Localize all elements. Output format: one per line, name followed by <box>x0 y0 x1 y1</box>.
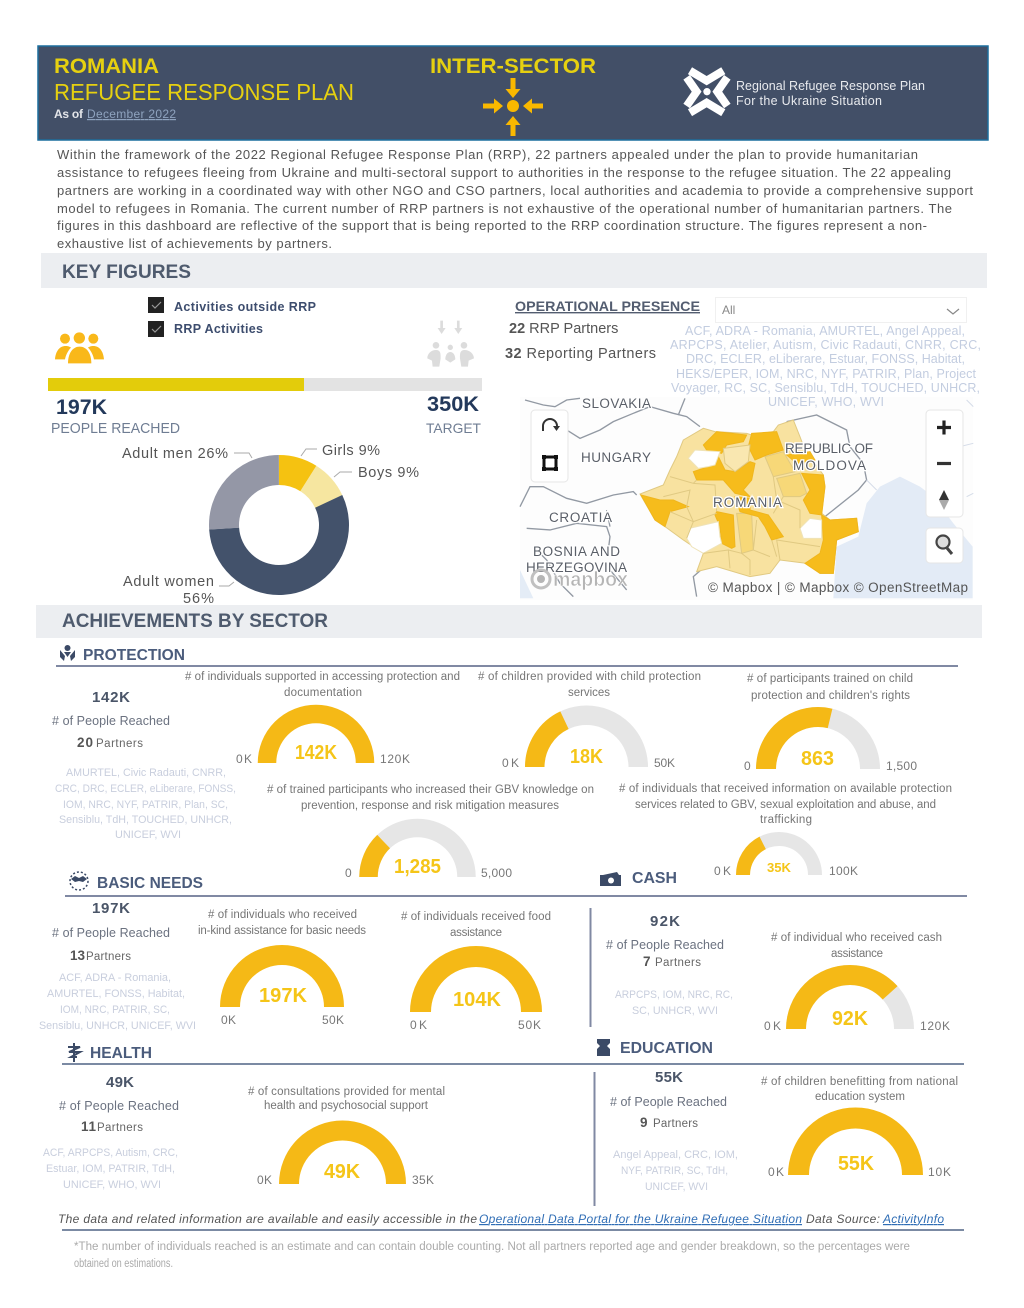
gauge: GBV information: trafficking <box>760 814 812 826</box>
heading: operational presence: OPERATIONAL PRESENCE <box>515 298 700 314</box>
gauge: mental health consultations: 49K <box>324 1161 361 1183</box>
icon: inward arrows <box>483 78 543 136</box>
map labels: HUNGARY <box>581 450 651 465</box>
summary stats <box>52 900 170 963</box>
gauge: child rights training <box>744 673 917 773</box>
logo text: Regional Refugee Response Plan <box>736 79 925 93</box>
summary stats: 142K <box>92 689 130 706</box>
gauge: protection and documentation: 120K <box>380 752 410 766</box>
map labels: BOSNIA AND <box>533 544 620 559</box>
partners: Estuar, IOM, PATRIR, TdH, <box>46 1163 175 1175</box>
partners: ARPCPS, IOM, NRC, RC, <box>615 989 733 1001</box>
gauge: mental health consultations: 35K <box>412 1173 434 1187</box>
donut chart: age and gender breakdown: Adult women <box>123 574 214 590</box>
gauge: food assistance: # of individuals received food <box>401 911 551 923</box>
heading: PROTECTION <box>83 647 185 664</box>
gauge: child protection services <box>478 671 701 770</box>
logo text <box>736 79 925 108</box>
figure: people reached: PEOPLE REACHED <box>51 421 180 437</box>
gauge: GBV information: 35K <box>767 860 792 875</box>
gauge: GBV information: 100K <box>829 864 858 878</box>
summary stats: 13 <box>70 948 85 963</box>
gauge: food assistance <box>401 911 551 1032</box>
legend: activity checkboxes: Activities outside RRP <box>174 300 316 314</box>
panel: header banner <box>38 46 988 140</box>
icon: health <box>68 1043 80 1062</box>
gauge: in-kind assistance <box>198 909 366 1027</box>
gauge: in-kind assistance: # of individuals who received <box>208 909 357 921</box>
date line: December 2022 <box>87 107 176 121</box>
gauge: child rights training: protection and children's rights <box>751 690 910 702</box>
text block: introduction: Within the framework of the 2022 Regional Refugee Response Plan (RRP), 22 partners appealed under the plan to provide humanitarian <box>57 147 918 162</box>
summary stats: 49K <box>106 1074 134 1091</box>
mapbox logo: mapbox <box>553 569 628 591</box>
text block: introduction: assistance to refugees fleeing from Ukraine and multi-sectoral support to authorities in the response to the refugee situation. The 22 appealing <box>57 165 951 180</box>
gauge: GBV knowledge: prevention, response and risk mitigation measures <box>301 800 559 812</box>
gauge: GBV knowledge: 1,285 <box>394 856 441 878</box>
partners <box>43 1147 178 1191</box>
partners: UNICEF, WVI <box>645 1181 708 1193</box>
gauge: food assistance: 104K <box>453 989 502 1011</box>
icon: protection hands <box>60 645 75 661</box>
gauge: GBV knowledge: 5,000 <box>481 866 512 880</box>
heading: CASH <box>632 870 677 887</box>
partners <box>55 767 236 841</box>
summary stats <box>610 1069 727 1130</box>
summary stats <box>59 1074 179 1134</box>
heading: EDUCATION <box>620 1040 713 1057</box>
figure: target <box>426 393 481 436</box>
partner list: ACF, ADRA - Romania, AMURTEL, Angel Appeal, <box>685 324 965 338</box>
partner list <box>670 324 981 409</box>
gauge: in-kind assistance: 50K <box>322 1013 344 1027</box>
partner list: Voyager, RC, SC, Sensiblu, TdH, TOUCHED, UNHCR, <box>671 381 980 395</box>
partners: SC, UNHCR, WVI <box>632 1005 718 1017</box>
gauge: GBV knowledge: 0 <box>345 866 352 880</box>
map labels: CROATIA <box>549 510 612 525</box>
gauge: in-kind assistance: 0K <box>221 1013 236 1027</box>
summary stats: Partners <box>653 1118 698 1130</box>
partner counts: 32 Reporting Partners <box>505 346 656 362</box>
map labels: MOLDOVA <box>793 458 866 473</box>
gauge: protection and documentation: # of individuals supported in accessing protection and <box>185 671 460 683</box>
summary stats <box>52 689 170 750</box>
summary stats: # of People Reached <box>52 714 170 728</box>
partners: UNICEF, WHO, WVI <box>63 1179 161 1191</box>
partners: Sensiblu, TdH, TOUCHED, UNHCR, <box>59 814 232 826</box>
summary stats: 197K <box>92 900 130 917</box>
Romania counties <box>640 420 858 577</box>
footnote <box>74 1241 910 1270</box>
text block: introduction: exhaustive list of achievements by partners. <box>57 236 332 251</box>
logo text: For the Ukraine Situation <box>736 94 882 108</box>
gauge: mental health consultations: health and psychosocial support <box>264 1100 429 1112</box>
gauge: child rights training: 863 <box>801 748 834 770</box>
gauge: child protection services: # of children provided with child protection <box>478 671 701 683</box>
gauge: cash assistance: assistance <box>831 948 883 960</box>
panel: health <box>43 1043 964 1191</box>
heading: HEALTH <box>90 1045 152 1062</box>
gauge: national education system: education system <box>815 1091 905 1103</box>
text block: introduction: partners are working in a coordinated way with other NGO and CSO partners, local authorities and academia to provide a comprehensive support <box>57 183 973 198</box>
partners: IOM, NRC, NYF, PATRIR, Plan, SC, <box>63 799 228 811</box>
map labels: REPUBLIC OF <box>785 441 873 456</box>
icon: basic needs <box>70 872 88 890</box>
partners: AMURTEL, Civic Radauti, CNRR, <box>66 767 226 779</box>
gauge: GBV information <box>619 783 952 878</box>
summary stats: Partners <box>96 738 143 750</box>
footnote: obtained on estimations. <box>74 1258 173 1270</box>
summary stats: 9 <box>640 1115 648 1130</box>
borders <box>520 398 867 597</box>
donut chart: age and gender breakdown: Girls 9% <box>322 443 380 459</box>
gauge: in-kind assistance: 197K <box>259 985 308 1007</box>
gauge: protection and documentation: documentation <box>284 687 362 699</box>
map labels <box>526 396 873 575</box>
gauge: national education system: 10K <box>928 1165 951 1179</box>
gauge: child protection services: services <box>568 687 610 699</box>
partner list: UNICEF, WHO, WVI <box>768 395 884 409</box>
icon: education <box>597 1039 610 1056</box>
progress bar: people reached vs target <box>48 378 482 391</box>
gauge: GBV information: services related to GBV, sexual exploitation and abuse, and <box>635 799 936 811</box>
gauge: national education system <box>761 1076 958 1179</box>
summary stats: # of People Reached <box>52 926 170 940</box>
icon: people reached <box>55 332 104 363</box>
gauge: child protection services: 50K <box>654 756 675 770</box>
gauge: GBV information: 0K <box>714 864 731 878</box>
gauge: child protection services: 18K <box>570 746 603 768</box>
heading: achievements by sector <box>36 605 982 638</box>
gauge: child protection services: 0K <box>502 756 519 770</box>
partners: NYF, PATRIR, SC, TdH, <box>621 1165 728 1177</box>
panel: protection <box>52 645 958 880</box>
partners: Angel Appeal, CRC, IOM, <box>613 1149 738 1161</box>
gauge: mental health consultations: # of consultations provided for mental <box>248 1086 445 1098</box>
partner list: ARPCPS, Atelier, Autism, Civic Radauti, CNRR, CRC, <box>670 338 981 352</box>
heading: BASIC NEEDS <box>97 875 203 892</box>
gauge: cash assistance <box>764 932 950 1033</box>
gauge: mental health consultations <box>248 1086 445 1187</box>
text block: introduction: model to refugees in Romania. The current number of RRP partners is not exhaustive of the operational number of humanitarian partners. The <box>57 201 952 216</box>
summary stats: 11 <box>81 1119 96 1134</box>
gauge: national education system: # of children benefitting from national <box>761 1076 958 1088</box>
summary stats: 7 <box>643 954 651 969</box>
title: Romania: ROMANIA <box>54 55 159 78</box>
footer: data source: ActivityInfo <box>882 1212 944 1226</box>
donut chart: age and gender breakdown: Adult men 26% <box>122 446 228 462</box>
map attribution: © Mapbox | © Mapbox © OpenStreetMap <box>708 580 968 595</box>
gauge: food assistance: assistance <box>450 927 502 939</box>
donut chart: age and gender breakdown: 56% <box>183 591 214 607</box>
donut chart: age and gender breakdown <box>122 443 419 607</box>
icon: cash <box>600 872 621 886</box>
text block: introduction <box>57 147 973 251</box>
map labels: HERZEGOVINA <box>526 560 627 575</box>
dropdown filter <box>716 298 966 322</box>
gauge: GBV information: # of individuals that received information on available protection <box>619 783 952 795</box>
partners: ACF, ARPCPS, Autism, CRC, <box>43 1147 178 1159</box>
gauge: national education system: 55K <box>838 1153 875 1175</box>
gauge: national education system: 0K <box>768 1165 784 1179</box>
footer: data source: The data and related information are available and easily accessible in the <box>58 1212 477 1226</box>
gauge: food assistance: 0K <box>410 1018 427 1032</box>
map: operational presence in Romania <box>520 396 973 600</box>
gauge: protection and documentation: 142K <box>295 742 337 764</box>
gauge: child rights training: 0 <box>744 759 751 773</box>
gauge: GBV knowledge: # of trained participants who increased their GBV knowledge on <box>267 784 594 796</box>
figure: people reached: 197K <box>56 396 107 419</box>
gauge: protection and documentation <box>185 671 460 766</box>
map labels: ROMANIA <box>713 495 782 510</box>
donut chart: age and gender breakdown: Boys 9% <box>358 465 419 481</box>
heading: Inter-sector: INTER-SECTOR <box>430 55 596 78</box>
legend: activity checkboxes: RRP Activities <box>174 322 263 336</box>
legend: activity checkboxes <box>148 297 316 337</box>
partner counts <box>505 321 656 362</box>
panel: education <box>594 1039 958 1206</box>
map controls left <box>531 410 568 482</box>
gauge: protection and documentation: 0K <box>236 752 252 766</box>
partner counts: 22 RRP Partners <box>509 321 618 337</box>
partner list: HEKS/EPER, IOM, NRC, NYF, PATRIR, Plan, Project <box>676 367 977 381</box>
dropdown filter: All <box>722 303 735 317</box>
map controls right <box>926 410 963 563</box>
partners <box>613 1149 738 1193</box>
summary stats: # of People Reached <box>606 938 724 952</box>
summary stats <box>606 913 724 969</box>
partners: AMURTEL, FONSS, Habitat, <box>47 988 185 1000</box>
summary stats: 92K <box>650 913 680 930</box>
heading: key figures: KEY FIGURES <box>62 261 191 283</box>
gauge: cash assistance: 92K <box>832 1008 869 1030</box>
partner list: DRC, ECLER, eLiberare, Estuar, FONSS, Habitat, <box>686 352 965 366</box>
gauge: food assistance: 50K <box>518 1018 541 1032</box>
panel: cash <box>590 870 950 1033</box>
panel: basic needs <box>39 872 967 1032</box>
gauge: in-kind assistance: in-kind assistance for basic needs <box>198 925 366 937</box>
summary stats: 20 <box>77 735 93 750</box>
summary stats: # of People Reached <box>59 1099 179 1113</box>
partners <box>39 972 196 1032</box>
partners: CRC, DRC, ECLER, eLiberare, FONSS, <box>55 783 236 795</box>
footer: data source: Operational Data Portal for the Ukraine Refugee Situation <box>479 1212 802 1226</box>
gauge: mental health consultations: 0K <box>257 1173 272 1187</box>
summary stats: Partners <box>97 1122 143 1134</box>
partners <box>615 989 733 1017</box>
gauge: child rights training: 1,500 <box>886 759 917 773</box>
gauge: GBV knowledge <box>267 784 594 880</box>
footer: data source <box>58 1212 964 1231</box>
sea <box>833 477 973 598</box>
partners: UNICEF, WVI <box>115 829 181 841</box>
title: Refugee Response Plan: REFUGEE RESPONSE PLAN <box>54 79 354 105</box>
icon: target people <box>427 321 474 367</box>
footer: data source: Data Source: <box>806 1212 880 1226</box>
summary stats: # of People Reached <box>610 1095 727 1109</box>
gauge: cash assistance: # of individual who received cash <box>771 932 942 944</box>
partners: IOM, NRC, PATRIR, SC, <box>60 1004 170 1016</box>
figure: target: TARGET <box>426 420 481 436</box>
map labels: SLOVAKIA <box>582 396 651 411</box>
date line: As of <box>54 107 84 121</box>
footnote: *The number of individuals reached is an estimate and can contain double counting. Not all partners reported age and gender breakdown, so the percentages were <box>74 1241 910 1253</box>
summary stats: Partners <box>86 951 131 963</box>
summary stats: 55K <box>655 1069 683 1086</box>
heading: achievements by sector: ACHIEVEMENTS BY SECTOR <box>62 610 328 632</box>
summary stats: Partners <box>655 957 701 969</box>
figure: people reached <box>51 396 180 437</box>
gauge: cash assistance: 120K <box>920 1019 950 1033</box>
partners: Sensiblu, UNHCR, UNICEF, WVI <box>39 1020 196 1032</box>
partners: ACF, ADRA - Romania, <box>59 972 171 984</box>
icon: RRP logo <box>687 71 727 113</box>
gauge: cash assistance: 0K <box>764 1019 781 1033</box>
heading: key figures <box>41 253 987 288</box>
text block: introduction: figures in this dashboard are reflective of the support that is being reported to the RRP coordination structure. The figures represent a non- <box>57 218 927 233</box>
figure: target: 350K <box>427 393 479 416</box>
gauge: child rights training: # of participants trained on child <box>747 673 913 685</box>
